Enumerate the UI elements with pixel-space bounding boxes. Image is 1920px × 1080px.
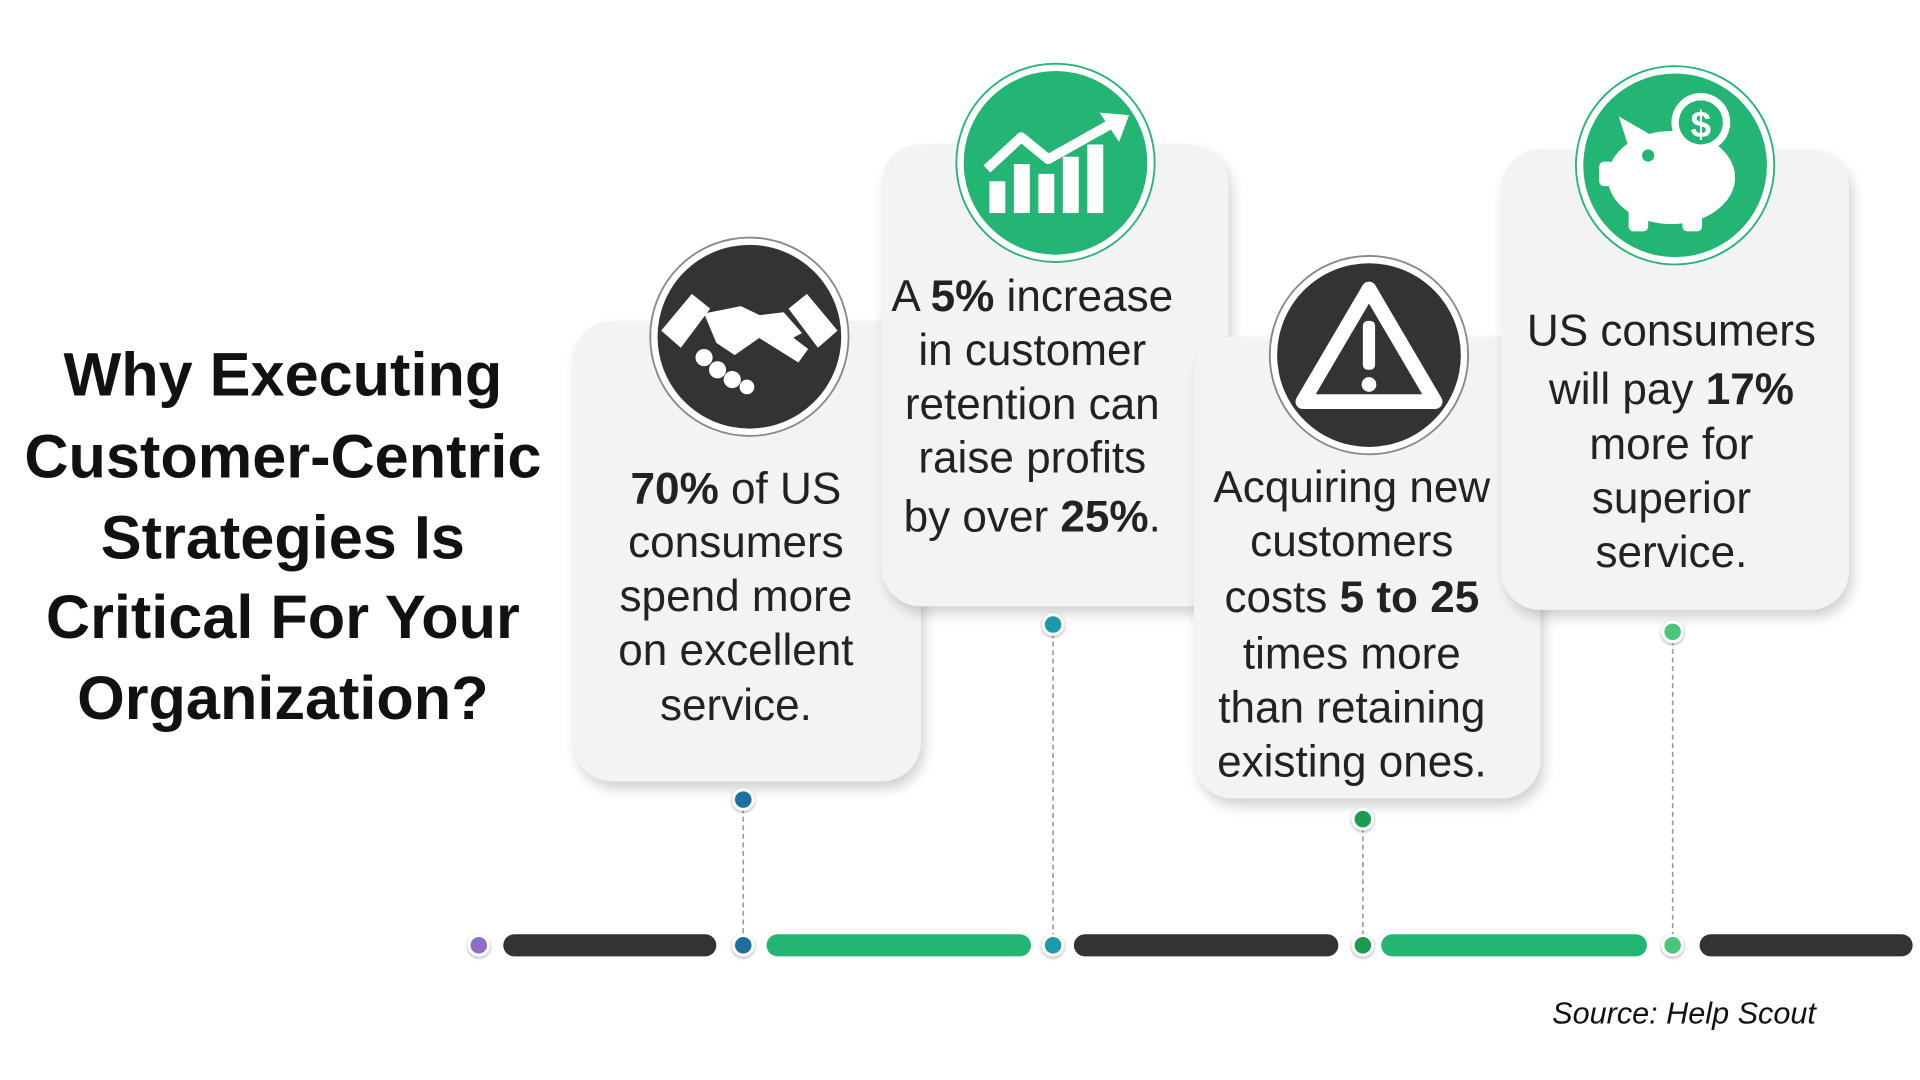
text 3: customers bbox=[1250, 517, 1453, 566]
title: Critical For Your bbox=[46, 583, 520, 651]
card 3 bbox=[1194, 256, 1540, 798]
text 4: will pay 17% bbox=[1548, 365, 1794, 414]
text 1 bbox=[618, 464, 854, 730]
text 1: 70% of US bbox=[631, 464, 841, 513]
text 2: retention can bbox=[905, 380, 1160, 429]
text 3: costs 5 to 25 bbox=[1224, 573, 1479, 622]
title: Strategies Is bbox=[101, 503, 465, 571]
text 1: spend more bbox=[620, 572, 852, 621]
icon: handshake bbox=[650, 238, 849, 436]
title: Why Executing bbox=[63, 341, 502, 409]
text 2: raise profits bbox=[918, 434, 1146, 483]
title bbox=[24, 341, 541, 732]
card 4 bbox=[1501, 66, 1849, 610]
text 2 bbox=[891, 272, 1173, 541]
text 3: than retaining bbox=[1218, 683, 1485, 732]
text 1: consumers bbox=[628, 518, 844, 567]
card 1 bbox=[573, 238, 921, 781]
timeline dots bbox=[469, 615, 1682, 955]
text 1: service. bbox=[660, 681, 812, 730]
icon: growth chart bbox=[956, 64, 1155, 262]
text 3: existing ones. bbox=[1217, 737, 1487, 786]
text 4 bbox=[1527, 306, 1816, 577]
title: Customer-Centric bbox=[24, 423, 541, 491]
icon: piggy bank bbox=[1576, 66, 1774, 264]
icon: piggy bank: $ bbox=[1691, 104, 1711, 145]
icon: warning bbox=[1270, 256, 1468, 454]
timeline bars bbox=[503, 934, 1913, 956]
dashed connectors bbox=[743, 624, 1673, 945]
text 2: in customer bbox=[918, 326, 1146, 375]
text 1: on excellent bbox=[618, 626, 854, 675]
text 3 bbox=[1213, 463, 1490, 786]
text 4: superior bbox=[1592, 474, 1751, 523]
text 4: more for bbox=[1589, 420, 1753, 469]
source: Source: Help Scout bbox=[1552, 997, 1817, 1031]
text 3: Acquiring new bbox=[1213, 463, 1490, 512]
text 4: service. bbox=[1595, 528, 1747, 577]
title: Organization? bbox=[77, 664, 489, 732]
text 4: US consumers bbox=[1527, 306, 1816, 355]
text 3: times more bbox=[1243, 630, 1461, 679]
card 2 bbox=[882, 64, 1228, 606]
text 2: A 5% increase bbox=[891, 272, 1173, 321]
text 2: by over 25%. bbox=[904, 492, 1161, 541]
